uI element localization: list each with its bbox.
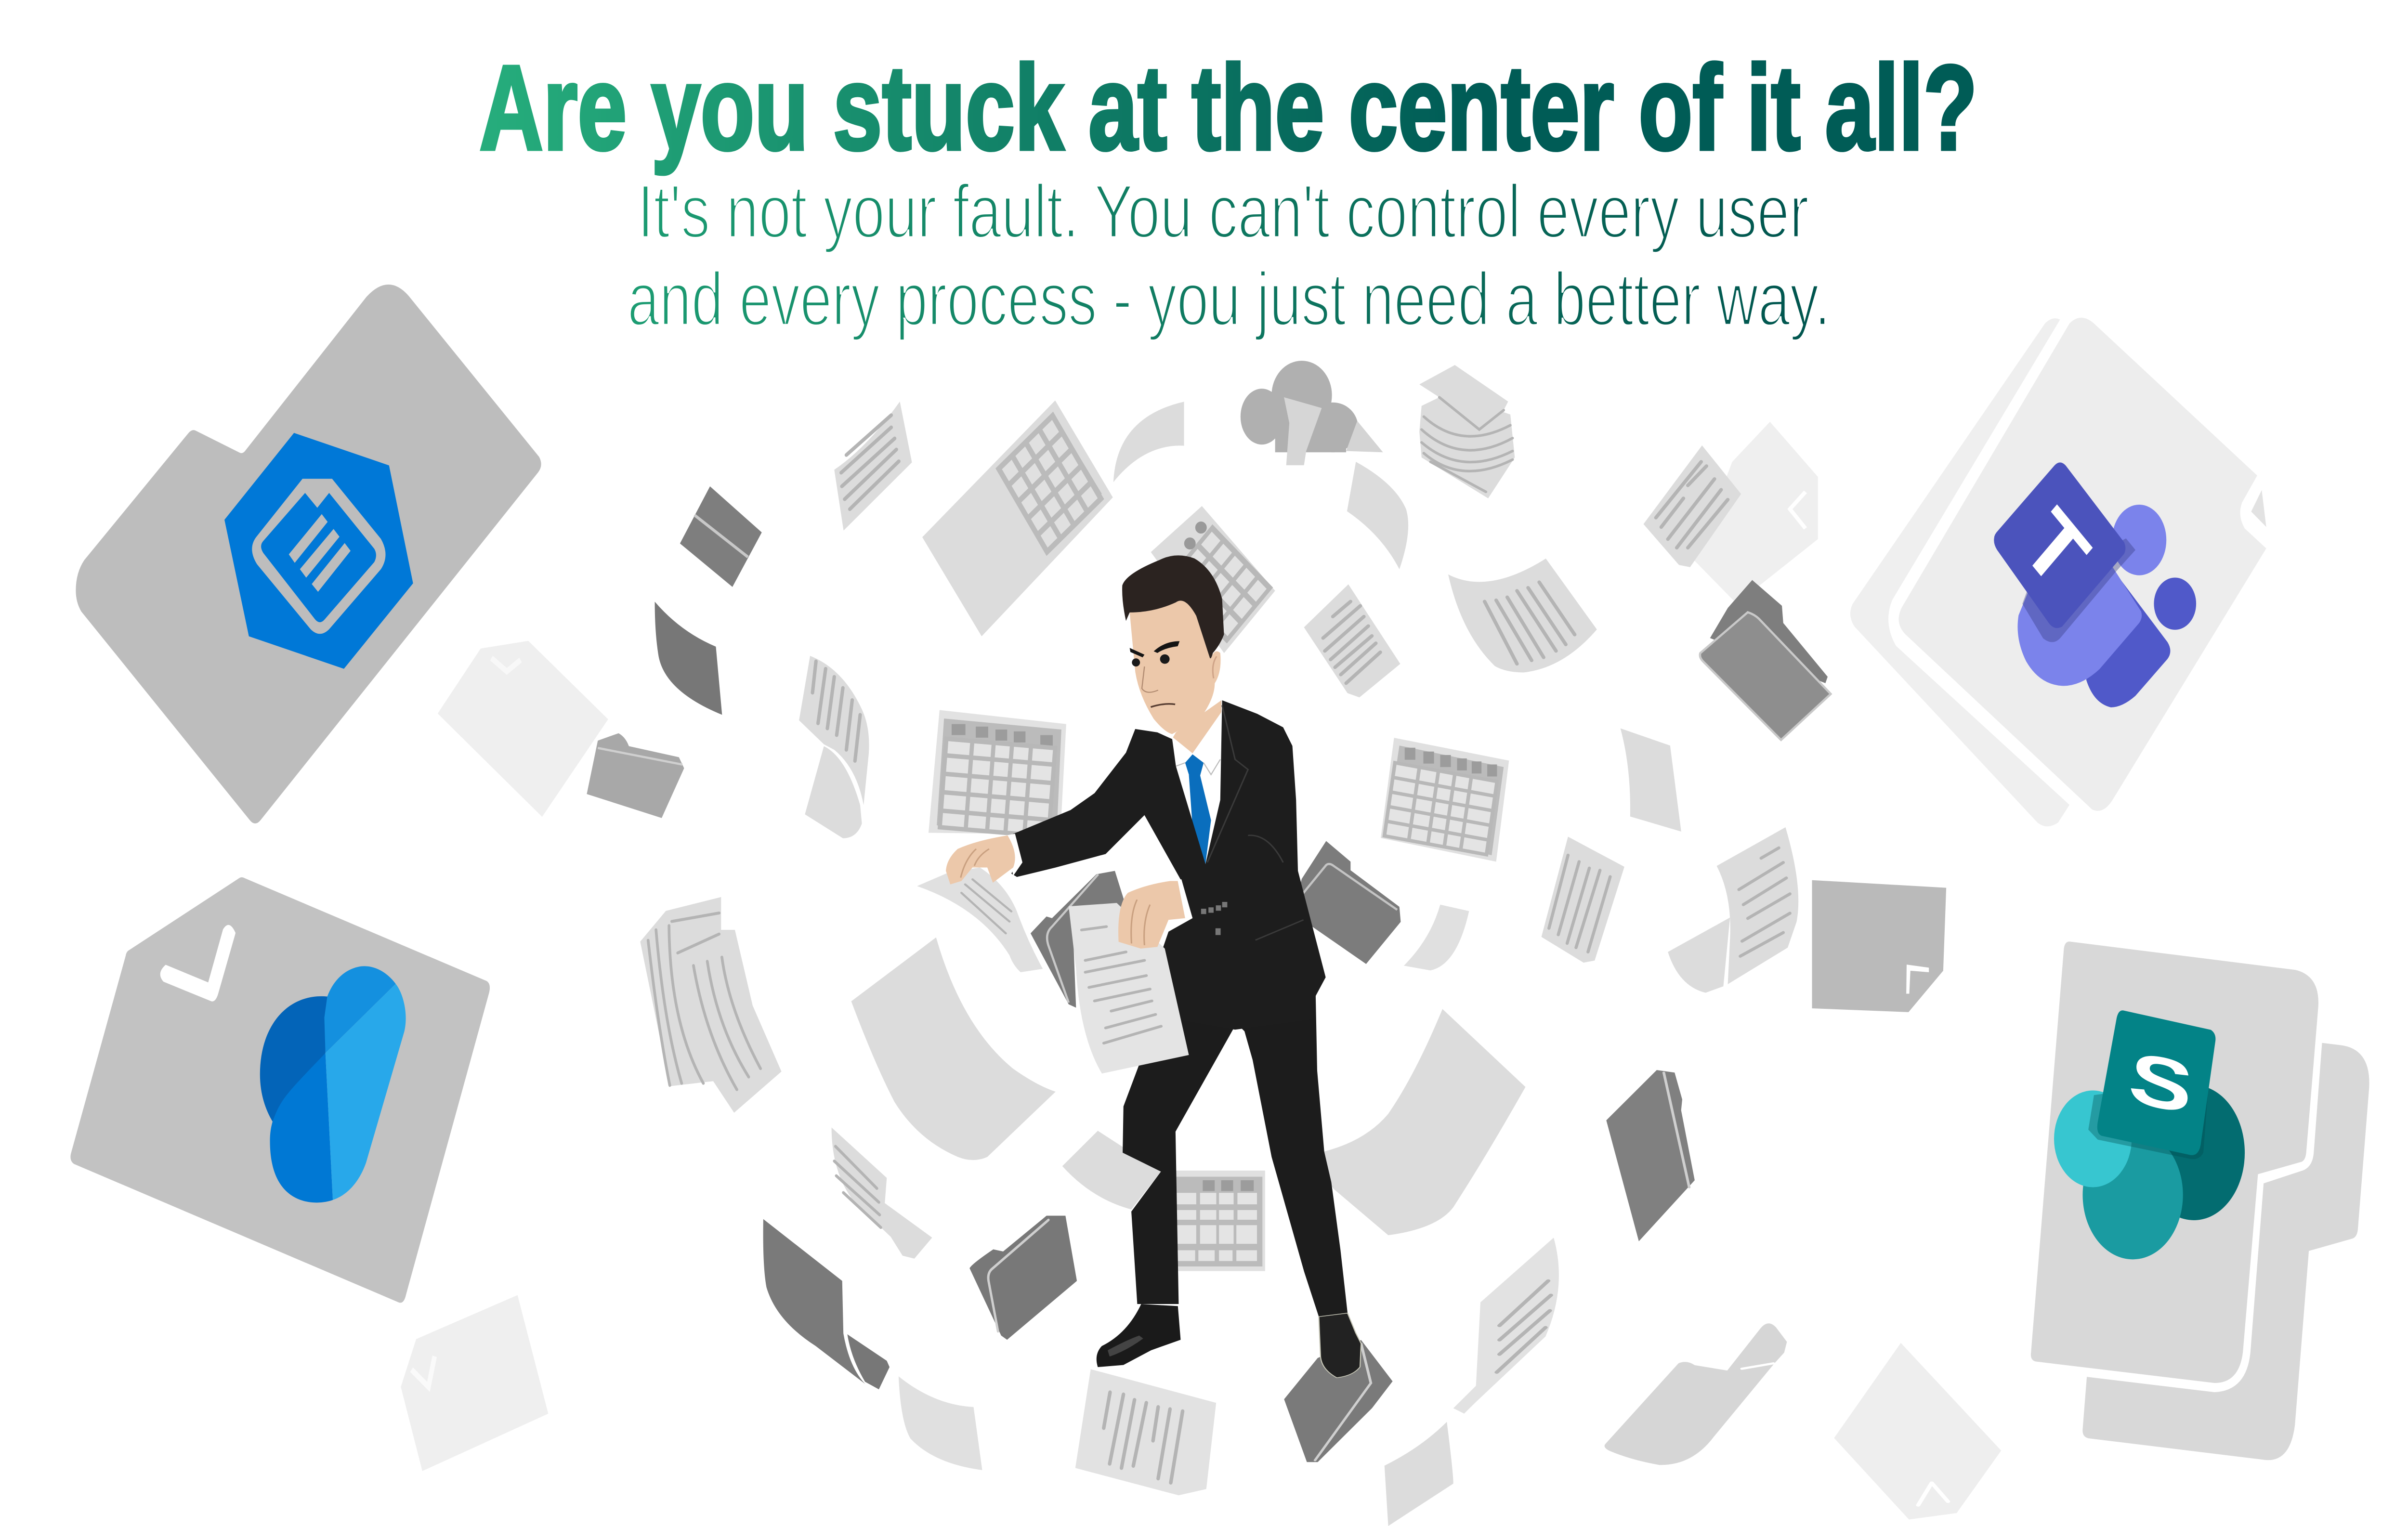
icon: large calendar sheet [922, 401, 1113, 636]
icon: lined page [1453, 1238, 1559, 1414]
neck and face [1130, 600, 1221, 753]
icon: right calendar [1381, 738, 1509, 861]
shoes [1097, 1304, 1361, 1378]
light blank sheet, lower left [401, 1295, 548, 1471]
folder behind held page [1031, 871, 1126, 1008]
upper body [917, 555, 1326, 1073]
icon: Teams logo: T [2006, 490, 2105, 607]
sheet held by outstretched hand [917, 868, 1043, 972]
icon: SharePoint logo [2054, 1010, 2245, 1259]
icon: small curl [1404, 905, 1469, 970]
icon: cloud with sheets [1241, 361, 1383, 465]
icon: bottom sheet [1385, 1422, 1453, 1526]
icon: big blank sheet [851, 938, 1056, 1160]
icon: text page [1304, 584, 1400, 697]
scattered documents: upper right [1151, 361, 1831, 993]
icon: dark folder [1700, 580, 1831, 740]
icon: lined page [1542, 837, 1624, 963]
scattered documents: lower right [1174, 1009, 2001, 1526]
man in black suit [917, 555, 1361, 1378]
icon: OneDrive cloud [260, 966, 406, 1202]
subtitle [628, 170, 1831, 341]
icon: stack of long pages [640, 897, 782, 1113]
icon: curled gray sheet [1605, 1323, 1787, 1465]
collar [1176, 759, 1220, 775]
facial features [1130, 641, 1179, 707]
scattered documents: lower left [640, 897, 1216, 1495]
icon: calendar behind head [1151, 506, 1275, 653]
icon: curled text page [799, 656, 869, 838]
icon: dark curled sheet [655, 601, 722, 715]
sheet held in front [1069, 903, 1189, 1073]
icon: curled lined page [1668, 827, 1798, 993]
icon: small textured sheet [899, 1376, 982, 1470]
icon: lined page at bottom [1075, 1369, 1216, 1495]
OneDrive document card [70, 877, 490, 1303]
icon: paper stack [1419, 365, 1515, 498]
icon: dark folder side [1606, 1070, 1695, 1241]
icon: big sheet right of leg [1307, 1009, 1525, 1235]
scattered documents: upper left [587, 401, 1113, 838]
icon: curled blank sheet [1347, 462, 1408, 569]
icon: tilted text page [834, 402, 912, 531]
icon: pale sheet with page [1644, 422, 1818, 604]
Microsoft SharePoint card [2031, 941, 2369, 1460]
icon: gray folder [587, 733, 684, 818]
icon: calendar next to arm [929, 710, 1066, 836]
icon: dark flat folder [680, 486, 762, 587]
icon: SharePoint logo: S [2125, 1036, 2197, 1130]
Microsoft Teams card [1850, 318, 2266, 826]
icon: blue hexagon [224, 433, 413, 669]
icon: Teams logo [1994, 462, 2196, 707]
trousers [1123, 963, 1348, 1317]
jacket [1009, 700, 1326, 1030]
outstretched hand [946, 834, 1022, 885]
tie [1185, 754, 1211, 864]
icon: dark folder behind man [1293, 841, 1400, 964]
icon: dark folder [969, 1216, 1077, 1340]
curled sheet near top [1113, 402, 1184, 482]
subtitle: It's not your fault. You can't control every user [638, 170, 1809, 254]
title: Are you stuck at the center of it all? [479, 41, 1977, 175]
shirt [1168, 699, 1228, 868]
gray folder sheet, right [1812, 880, 1946, 1012]
icon: sheet under thigh [1062, 1131, 1161, 1210]
jacket buttons [1201, 902, 1227, 935]
lower hand [1118, 879, 1192, 949]
light blank sheet, upper left [438, 641, 608, 817]
subtitle: and every process - you just need a better way. [628, 257, 1831, 341]
folder with blue document hexagon icon [76, 285, 541, 823]
icon: pale diamond sheet [1834, 1343, 2001, 1520]
icon: lined page with curl [832, 1127, 932, 1259]
hair [1122, 555, 1224, 658]
icon: folder under foot [1284, 1340, 1393, 1462]
icon: curved text page [1448, 559, 1597, 672]
icon: dark curled sheet [763, 1219, 890, 1389]
icon: lower calendar [1174, 1171, 1265, 1271]
icon: blank sheet right [1621, 729, 1681, 832]
